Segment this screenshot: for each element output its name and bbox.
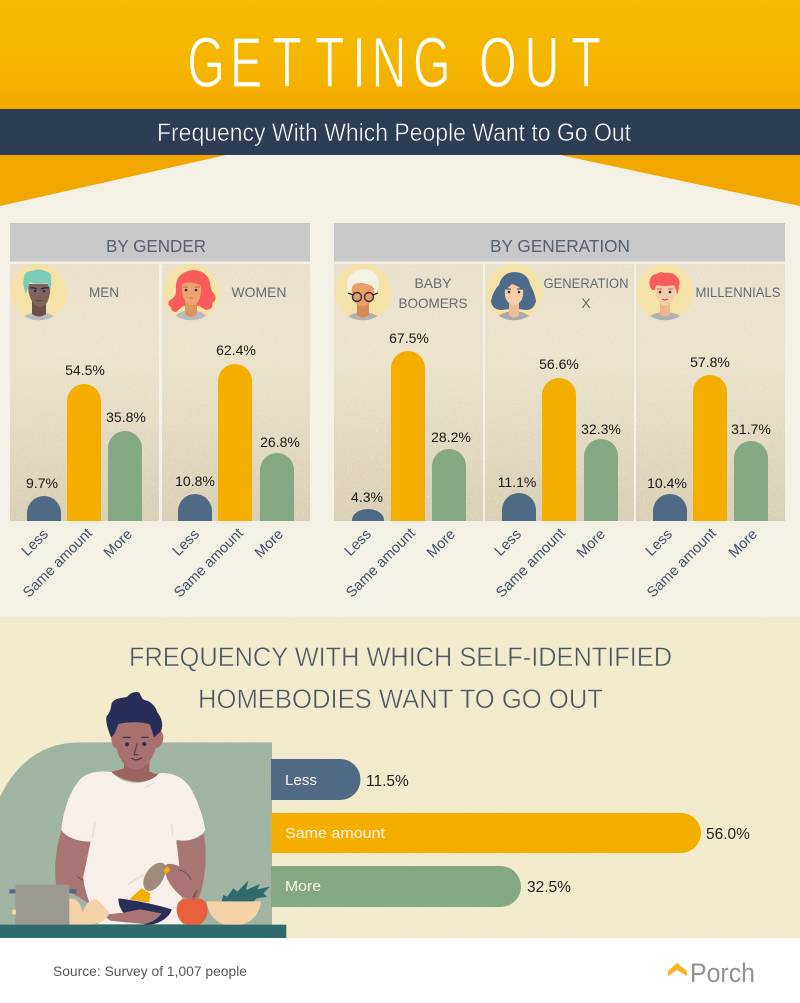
bar: more: More <box>285 878 321 895</box>
values: millennials: 57.8% <box>690 354 730 370</box>
heading: homebodies: FREQUENCY WITH WHICH SELF-IDENTIFIED <box>129 642 672 672</box>
values: men: 35.8% <box>106 409 146 425</box>
axis labels: women <box>170 526 287 601</box>
values: generation x: 11.1% <box>498 474 536 490</box>
mortar and hand <box>103 898 172 925</box>
values: men <box>26 362 146 491</box>
axis labels: baby boomers: More <box>424 527 459 561</box>
bar: same amount <box>271 813 750 853</box>
panel: homebodies <box>0 617 800 938</box>
forearm lines <box>77 869 197 897</box>
values: generation x: 56.6% <box>539 356 579 372</box>
logo: porch: Porch <box>690 958 755 988</box>
values: women: 62.4% <box>216 342 256 358</box>
values: women: 26.8% <box>260 434 300 450</box>
bars: millennials <box>653 375 768 521</box>
values: women: 10.8% <box>175 473 215 489</box>
axis labels: baby boomers <box>342 526 459 601</box>
heading: homebodies: HOMEBODIES WANT TO GO OUT <box>198 684 603 714</box>
salad bowl <box>207 881 270 926</box>
heading: by generation: BY GENERATION <box>490 236 630 256</box>
values: men: 9.7% <box>26 475 58 491</box>
axis labels: baby boomers: Less <box>342 527 375 560</box>
label: baby boomers <box>398 275 468 311</box>
values: millennials: 31.7% <box>731 421 771 437</box>
axis labels: millennials: More <box>726 527 761 561</box>
icon: millennial avatar <box>636 264 694 320</box>
chart: generation x <box>485 264 634 601</box>
source note: Source: Survey of 1,007 people <box>53 964 247 979</box>
neck <box>111 762 159 782</box>
axis labels: generation x <box>492 526 609 601</box>
label: generation x <box>544 275 628 311</box>
icon: man avatar <box>10 264 68 320</box>
axis labels: millennials: Same amount <box>644 526 720 601</box>
axis labels: men: More <box>101 527 136 561</box>
heading: by gender <box>10 223 310 262</box>
apple <box>177 890 208 926</box>
header banner <box>0 0 800 206</box>
label: baby boomers: BABY <box>414 275 452 291</box>
label: millennials: MILLENNIALS <box>696 284 780 300</box>
values: baby boomers: 67.5% <box>389 330 429 346</box>
bar: more <box>271 866 571 907</box>
values: millennials: 10.4% <box>647 475 687 491</box>
face <box>123 737 149 760</box>
axis labels: women: Less <box>170 527 203 560</box>
subtitle band <box>0 109 800 155</box>
label: men: MEN <box>89 284 119 300</box>
values: men: 54.5% <box>65 362 105 378</box>
axis labels: millennials: Less <box>643 527 676 560</box>
panel: by gender <box>10 223 310 601</box>
footer <box>0 938 800 1003</box>
hair <box>106 692 162 737</box>
bar: less: 11.5% <box>366 773 409 790</box>
panel: by generation <box>334 223 785 601</box>
values: generation x: 32.3% <box>581 421 621 437</box>
heading: homebodies <box>129 642 672 714</box>
bars: men <box>27 384 142 521</box>
chart: men <box>10 264 159 601</box>
shirt wrinkles <box>92 782 173 884</box>
label: generation x: X <box>581 295 591 311</box>
axis labels: generation x: Less <box>492 527 525 560</box>
axis labels: millennials <box>643 526 761 601</box>
icon: generation x avatar <box>486 264 542 320</box>
head <box>111 720 163 769</box>
heading: by gender: BY GENDER <box>106 236 206 256</box>
axis labels: baby boomers: Same amount <box>343 526 419 601</box>
heading: by generation <box>334 223 785 262</box>
values: baby boomers <box>351 330 471 505</box>
title: GETTING OUT <box>187 23 601 102</box>
label: women: WOMEN <box>232 284 286 300</box>
axis labels: women: More <box>252 527 287 561</box>
axis labels: women: Same amount <box>171 526 247 601</box>
values: women <box>175 342 300 489</box>
garlic <box>69 898 109 924</box>
axis labels: generation x: Same amount <box>493 526 569 601</box>
subtitle band: Frequency With Which People Want to Go Out <box>157 119 631 147</box>
bar: more: 32.5% <box>527 879 571 896</box>
chart: millennials <box>636 264 785 601</box>
values: millennials <box>647 354 771 491</box>
label: baby boomers: BOOMERS <box>398 295 468 311</box>
chart: baby boomers <box>334 264 483 601</box>
axis labels: men <box>19 526 136 601</box>
bar: same amount: Same amount <box>285 825 386 842</box>
right arm <box>165 834 206 902</box>
icon: boomer avatar <box>334 264 392 320</box>
chart: women <box>162 264 310 601</box>
values: baby boomers: 28.2% <box>431 429 471 445</box>
shirt <box>61 772 205 924</box>
illustration: person cooking <box>0 692 286 938</box>
pestle <box>129 863 171 903</box>
counter <box>0 925 286 938</box>
axis labels: men: Same amount <box>20 526 96 601</box>
icon: woman avatar <box>162 264 220 320</box>
bar: less: Less <box>285 772 317 789</box>
bar: less <box>271 759 409 800</box>
pot <box>9 885 77 925</box>
axis labels: men: Less <box>19 527 52 560</box>
bars: baby boomers <box>352 351 466 521</box>
values: baby boomers: 4.3% <box>351 489 383 505</box>
axis labels: generation x: More <box>574 527 609 561</box>
bar: same amount: 56.0% <box>706 826 750 843</box>
bars: women <box>178 364 294 521</box>
bars: generation x <box>502 378 618 521</box>
values: generation x <box>498 356 621 490</box>
left arm <box>55 830 113 913</box>
label: generation x: GENERATION <box>544 275 628 291</box>
